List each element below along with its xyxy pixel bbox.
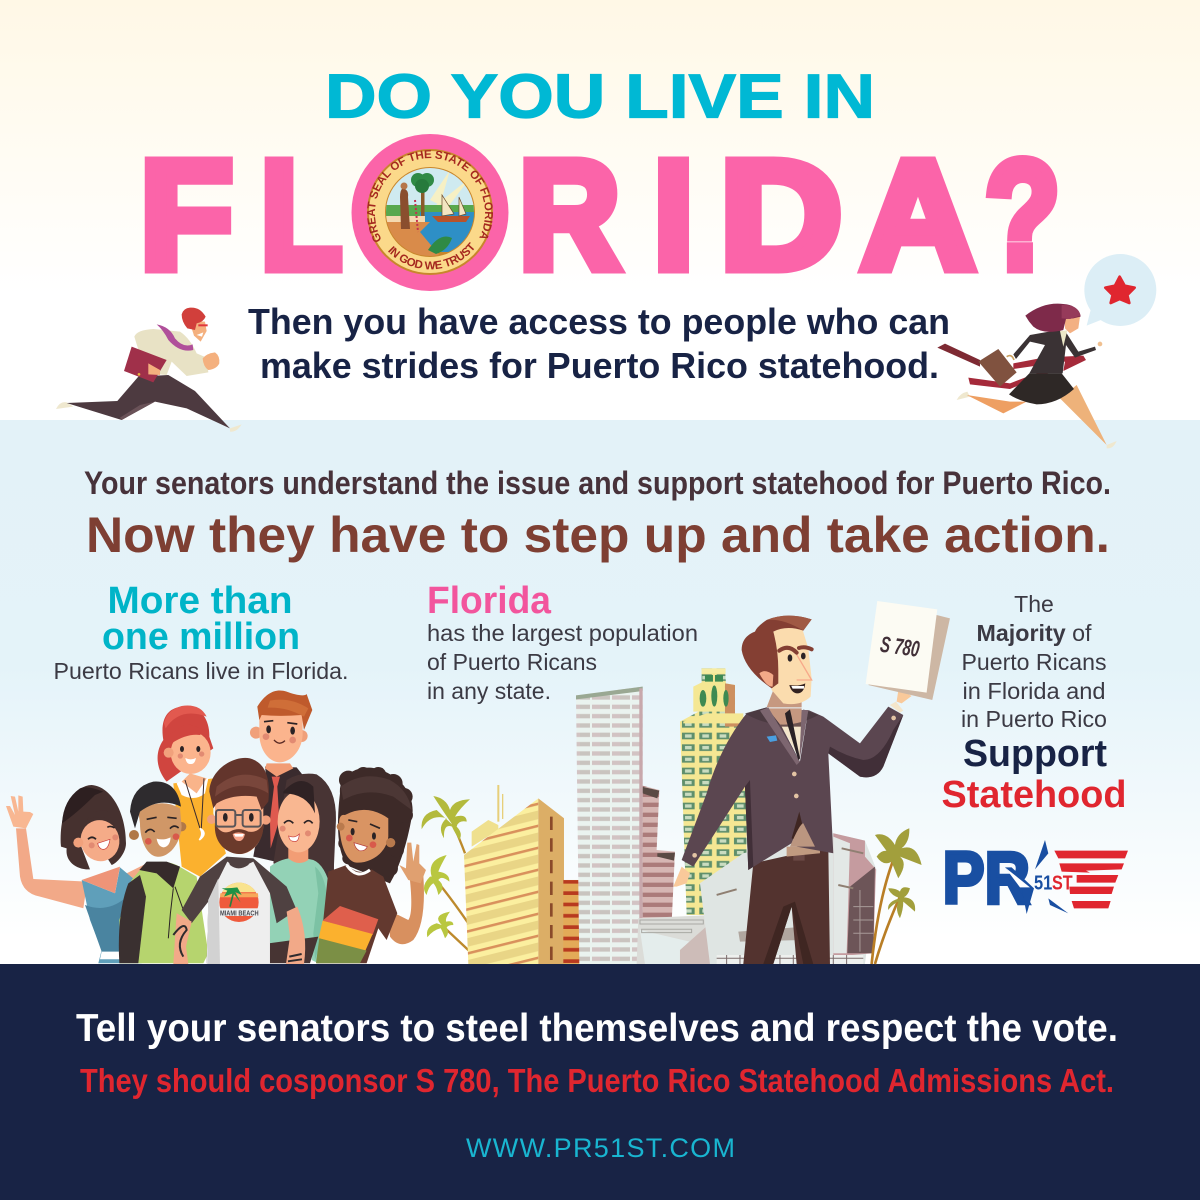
green and yellow tower <box>680 668 747 915</box>
text block: Florida largest population: of Puerto Ricans <box>427 649 597 675</box>
logo: PR51ST: ST <box>1052 871 1073 894</box>
text block: majority support statehood: The <box>1014 591 1054 617</box>
title: Florida with seal as the letter O: R <box>519 129 620 301</box>
panel: top header background <box>0 0 1200 420</box>
person: woman with long dark hair in teal shirt <box>269 774 336 963</box>
text block: majority support statehood: in Florida and <box>962 678 1106 704</box>
icon: Miami Beach shirt logo: MIAMI BEACH <box>220 908 259 917</box>
icon: running woman with briefcase and ribbon <box>937 254 1156 448</box>
person: waving woman in blue top <box>6 785 150 963</box>
subheading: Then you have access to people who can <box>248 301 950 342</box>
text block: Florida largest population: in any state. <box>427 678 551 704</box>
title: Florida with seal as the letter O <box>140 129 1060 301</box>
text block: more than one million: Puerto Ricans live in Florida. <box>54 658 348 684</box>
text block: majority support statehood: Puerto Ricans <box>962 649 1106 675</box>
document labelled S 780 <box>866 601 950 700</box>
text block: majority support statehood <box>942 591 1126 816</box>
text block: Florida largest population: has the largest population <box>427 620 698 646</box>
yellow building <box>464 785 581 964</box>
logo: PR51ST: PR <box>943 837 1030 919</box>
man in suit holding S 780 bill <box>673 601 950 964</box>
text block: majority support statehood: in Puerto Rico <box>961 706 1107 732</box>
illustration: group of diverse people <box>6 690 426 964</box>
icon: Miami Beach shirt logo <box>219 883 259 922</box>
title: Florida with seal as the letter O: I <box>654 129 694 301</box>
person: man with orange hair and red tie <box>250 690 334 875</box>
icon: great seal of Florida: IN GOD WE TRUST <box>388 242 474 270</box>
illustration: Miami city skyline and palm trees <box>422 601 950 964</box>
subheading <box>248 301 950 386</box>
modern stadium buildings <box>637 833 877 964</box>
logo: PR51ST <box>943 837 1128 919</box>
text block: more than one million <box>54 580 348 684</box>
call to action: tell your senators: Tell your senators to steel themselves and respect the vote. <box>76 1007 1118 1050</box>
text block: majority support statehood: Statehood <box>942 774 1126 816</box>
website url: WWW.PR51ST.COM <box>466 1133 735 1163</box>
text block: Florida largest population: Florida <box>427 580 552 622</box>
title: Florida with seal as the letter O: F <box>140 129 233 301</box>
person: bearded man in Miami Beach shirt <box>173 758 305 964</box>
title: do you live in: DO YOU LIVE IN <box>325 62 875 132</box>
icon: speech bubble with star <box>1084 254 1156 326</box>
title: Florida with seal as the letter O: L <box>260 129 342 301</box>
icon: great seal of Florida <box>352 134 508 291</box>
text block: more than one million: one million <box>102 616 300 658</box>
panel: middle information background <box>0 420 1200 965</box>
tall grey tower <box>576 687 675 964</box>
text block: majority support statehood: Majority of <box>976 620 1092 646</box>
palm trees right <box>872 828 922 964</box>
icon: running man with red briefcase <box>56 308 242 432</box>
icon: great seal of Florida: GREAT SEAL OF THE STATE OF FLORIDA <box>367 150 493 242</box>
subheading: make strides for Puerto Rico statehood. <box>260 345 939 386</box>
logo: PR51ST: 51 <box>1034 871 1052 894</box>
document labelled S 780: S 780 <box>879 631 922 662</box>
person: woman with curly hair and striped shirt <box>316 767 426 963</box>
panel: bottom call to action background <box>0 964 1200 1200</box>
heading: take action: Now they have to step up and take action. <box>86 507 1110 563</box>
palm trees left <box>422 796 470 952</box>
person: man in green jacket <box>119 782 208 963</box>
text: senators support: Your senators understand the issue and support statehood for Puerto Rico. <box>84 465 1111 501</box>
text block: majority support statehood: Support <box>963 733 1107 775</box>
title: Florida with seal as the letter O: ? <box>985 129 1060 301</box>
person: red-haired woman in yellow top <box>158 706 226 877</box>
title: Florida with seal as the letter O: D <box>720 129 842 301</box>
title: Florida with seal as the letter O: A <box>861 129 975 301</box>
text block: Florida largest population <box>427 580 698 704</box>
text block: more than one million: More than <box>108 580 292 622</box>
